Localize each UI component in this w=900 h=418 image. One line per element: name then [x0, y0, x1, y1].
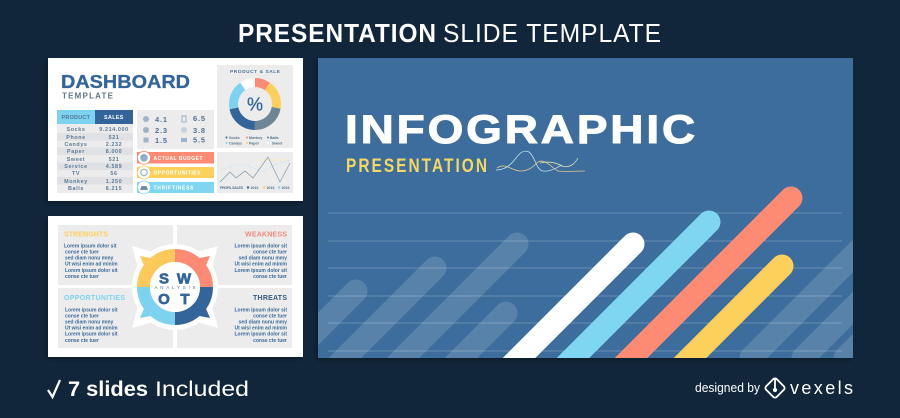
opportunities text: Lorem ipsum dolor sit: [65, 332, 118, 338]
subheading: presentation: PRESENTATION: [346, 156, 489, 177]
panel: dashboard slide: [48, 58, 303, 201]
opportunities text: [64, 295, 125, 344]
diagonal colored bars: [509, 198, 791, 368]
bar: actual budget: [137, 151, 214, 164]
strengths text: STRENGHTS: [64, 232, 108, 238]
panel: product and sale donut: [217, 65, 293, 148]
heading: dashboard: DASHBOARD: [61, 72, 190, 92]
line chart: 2016: [250, 186, 258, 190]
bar: actual budget: ACTUAL BUDGET: [154, 156, 202, 162]
product sales table: 56: [110, 171, 118, 177]
stats panel: 5.5: [193, 136, 206, 144]
product sales table: Monkey: [64, 179, 88, 185]
vexels logo: [695, 377, 853, 399]
donut legend: Monkey: [249, 136, 262, 140]
mini wave lines: [496, 151, 585, 171]
weakness text: Lorem ipsum dolor sit: [234, 268, 287, 274]
swot compass wheel: ANALYSIS: [154, 285, 196, 290]
panel: swot slide: [48, 216, 303, 357]
strengths text: [64, 232, 118, 280]
product sales table: 8.000: [106, 149, 122, 155]
stats panel: 3.8: [193, 126, 206, 135]
donut legend: Socks: [229, 136, 240, 140]
product sales table: 521: [109, 135, 119, 141]
weakness text: WEAKNESS: [245, 232, 287, 238]
line chart: 2016: [266, 186, 274, 190]
heading: dashboard: TEMPLATE: [62, 92, 114, 100]
threats text: [234, 295, 288, 344]
line chart: PROFIL SALES: [220, 186, 244, 190]
bar: thriftiness: THRIFTINESS: [154, 186, 194, 192]
vexels logo: designed by: [695, 380, 760, 395]
strengths text: Ut wisi enim ad minim: [65, 262, 118, 268]
product sales table: 4.589: [106, 164, 122, 170]
product sales table: Balls: [68, 186, 84, 192]
opportunities text: OPPORTUNITIES: [64, 295, 125, 302]
opportunities text: conse cte tuer: [65, 338, 99, 344]
bar: thriftiness: [137, 181, 214, 194]
threats text: THREATS: [253, 295, 287, 302]
strengths text: conse cte tuer: [65, 274, 99, 280]
product sales table: TV: [72, 171, 80, 177]
donut legend: Paper: [249, 142, 260, 146]
donut legend: Candys: [229, 142, 242, 146]
threats text: conse cte tuer: [253, 314, 287, 320]
product sales table: Phone: [66, 135, 86, 141]
product sales table: PRODUCT: [62, 115, 91, 121]
threats text: sed diam nonu mmy: [239, 320, 287, 326]
product sales table: Service: [64, 164, 88, 170]
strengths text: Lorem ipsum dolor sit: [64, 244, 117, 250]
swot compass wheel: S: [159, 270, 169, 288]
opportunities text: Lorem ipsum dolor sit: [65, 308, 118, 314]
bar: opportunities: OPPORTUNITIES: [154, 170, 201, 176]
line chart: 2016: [282, 186, 290, 190]
product sales table: SALES: [104, 115, 124, 121]
weakness text: Lorem ipsum dolor sit: [234, 244, 287, 250]
weakness text: Ut wisi enim ad minim: [234, 262, 288, 268]
opportunities text: conse cte tuer: [65, 314, 99, 320]
weakness text: conse cte tuer: [253, 250, 287, 256]
product sales table: [57, 110, 133, 193]
threats text: Lorem ipsum dolor sit: [234, 308, 287, 314]
stats panel: 4.1: [155, 115, 168, 124]
donut legend: [226, 136, 283, 146]
strengths text: conse cte tuer: [65, 250, 99, 256]
stats panel: 1.5: [155, 136, 168, 145]
title: SLIDE TEMPLATE: [443, 18, 662, 48]
threats text: Ut wisi enim ad minim: [234, 326, 288, 332]
product sales table: 8.215: [106, 186, 122, 192]
product sales table: 2.232: [106, 142, 122, 148]
swot compass wheel: [132, 244, 218, 330]
opportunities text: sed diam nonu mmy: [65, 320, 114, 326]
swot compass wheel: W: [177, 270, 192, 288]
opportunities text: Ut wisi enim ad minim: [65, 326, 118, 332]
panel: product and sale donut: %: [247, 94, 263, 114]
strengths text: Lorem ipsum dolor sit: [65, 268, 118, 274]
stats panel: [137, 110, 214, 149]
stats panel: 6.5: [193, 114, 206, 123]
swot quadrants: [58, 225, 292, 348]
donut legend: Sweet: [272, 142, 283, 146]
product sales table: Sweet: [67, 157, 85, 163]
title: PRESENTATION: [238, 18, 437, 48]
threats text: conse cte tuer: [253, 338, 287, 344]
heading: dashboard: [61, 72, 190, 100]
threats text: Lorem ipsum dolor sit: [234, 332, 287, 338]
weakness text: [234, 232, 288, 280]
line chart: [217, 152, 293, 193]
background faded stripes: [318, 232, 853, 358]
slide count label: [48, 378, 249, 401]
panel: main infographic slide: [316, 58, 853, 360]
bar: opportunities: [137, 166, 214, 179]
heading: infographic: INFOGRAPHIC: [345, 108, 698, 152]
product sales table: 521: [109, 157, 119, 163]
swot compass wheel: O: [158, 291, 170, 308]
stats panel: 2.3: [155, 126, 168, 135]
strengths text: sed diam nonu mmy: [65, 256, 114, 262]
product sales table: Paper: [67, 149, 85, 155]
icon: vexels diamond: [764, 377, 786, 399]
weakness text: sed diam nonu mmy: [239, 256, 287, 262]
panel: product and sale donut: PRODUCT & SALE: [230, 69, 281, 75]
slide count label: 7 slides: [68, 378, 148, 401]
product sales table: Candys: [64, 142, 88, 148]
weakness text: conse cte tuer: [253, 274, 287, 280]
product sales table: 1.250: [106, 179, 122, 185]
donut chart: [234, 82, 276, 126]
product sales table: Socks: [67, 127, 85, 133]
swot compass wheel: T: [180, 291, 190, 308]
icon: check mark: [48, 380, 60, 397]
slide count label: Included: [155, 378, 249, 401]
donut legend: Balls: [270, 136, 279, 140]
horizontal grid lines: [328, 213, 842, 351]
product sales table: 9.214.000: [99, 127, 129, 133]
title: [238, 18, 662, 48]
vexels logo: vexels: [790, 378, 853, 398]
